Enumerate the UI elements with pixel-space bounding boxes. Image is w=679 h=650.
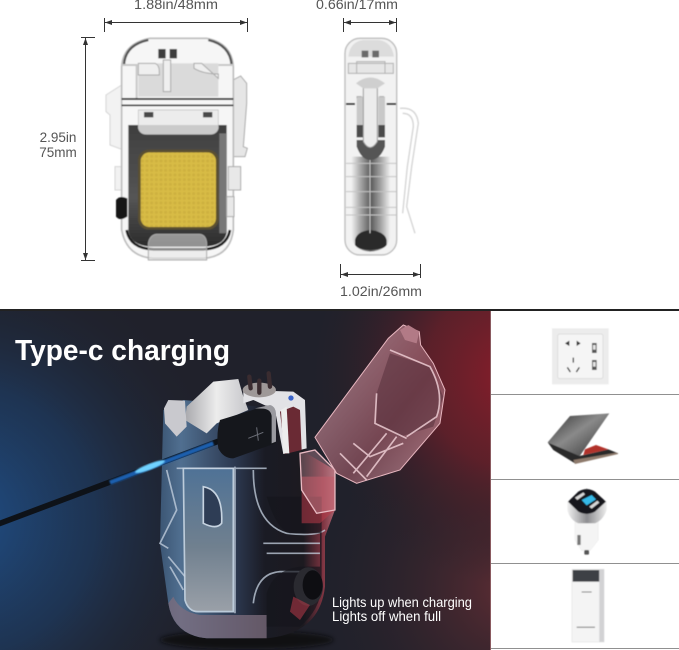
lower body — [160, 400, 335, 638]
block highlight — [281, 407, 289, 453]
metal plate — [185, 379, 248, 433]
plug collar — [255, 405, 276, 443]
right clip — [233, 76, 247, 157]
hinge — [300, 450, 335, 513]
side frame — [122, 65, 233, 100]
window round opening — [203, 487, 222, 527]
lighter photo — [0, 325, 445, 649]
note: charging indicator: Lights up when charging — [332, 595, 472, 610]
red lower glow — [380, 498, 490, 650]
note: charging indicator: Lights off when full — [332, 609, 441, 624]
case outline — [345, 38, 397, 255]
side strips — [219, 133, 227, 233]
dimension: side depth: 1.02in/26mm — [340, 284, 422, 299]
blue led — [288, 395, 294, 401]
left cap — [164, 400, 187, 437]
COB yellow — [141, 152, 216, 227]
dark battery body — [128, 125, 227, 247]
bottom dark curve — [355, 230, 387, 250]
central blade — [363, 83, 377, 147]
dark lower core — [352, 157, 390, 252]
top electrodes — [362, 51, 379, 57]
electrodes — [249, 373, 270, 393]
seal — [346, 97, 396, 104]
neck — [138, 110, 218, 134]
block dark — [280, 407, 302, 454]
hinge ring — [357, 140, 385, 160]
plug logo — [248, 427, 263, 441]
icon: laptop — [548, 413, 618, 464]
side dark windows — [357, 125, 385, 137]
electrode ring — [243, 383, 276, 397]
outer case — [122, 38, 233, 258]
note: charging indicator — [332, 595, 472, 624]
floor shadow — [160, 631, 333, 649]
usb plug — [218, 406, 268, 458]
left transparent flap — [106, 85, 127, 190]
top edge — [0, 309, 679, 311]
right side bumps — [227, 167, 241, 217]
black core — [267, 497, 322, 627]
metal insert — [138, 63, 218, 97]
panel background — [0, 311, 490, 650]
column dividers — [491, 394, 679, 648]
blue background glow — [0, 312, 164, 650]
lid top latch — [400, 325, 419, 343]
open lid — [315, 325, 445, 483]
panel: type-c charging photo — [0, 311, 490, 650]
blade neck — [356, 77, 385, 88]
seal lines — [122, 99, 233, 105]
cable blue glow — [110, 443, 213, 483]
neck windows — [144, 112, 212, 117]
button ring — [294, 567, 323, 606]
side button — [116, 197, 127, 219]
insert notches — [138, 60, 218, 92]
cable — [0, 441, 220, 524]
top cap shading — [348, 40, 394, 57]
product: lighter front view — [106, 38, 247, 260]
electrodes — [158, 49, 177, 58]
column background — [490, 311, 679, 650]
side columns — [357, 97, 385, 137]
bottom curve — [127, 230, 230, 249]
dimension: front width — [104, 0, 248, 32]
lid ribs — [340, 350, 440, 480]
panel: charging sources — [490, 311, 679, 650]
top cap dark edge — [124, 40, 232, 65]
COB light panel — [138, 150, 219, 230]
dimension: height: 75mm — [39, 145, 77, 160]
bottom tab — [148, 234, 207, 260]
red reflection — [290, 477, 335, 620]
glass window — [183, 468, 233, 612]
cable flare — [134, 459, 166, 474]
icon: power bank — [572, 569, 604, 642]
top frame — [348, 62, 393, 73]
lid inner dark — [377, 353, 443, 437]
body highlights — [160, 467, 325, 613]
pocket clip — [400, 108, 418, 233]
ribs — [346, 160, 396, 233]
product: lighter side view — [345, 38, 418, 255]
side button — [303, 570, 323, 600]
icon: wall socket — [552, 328, 609, 384]
dimension: side depth — [340, 264, 422, 299]
column left edge — [490, 311, 491, 650]
dimension: side width — [316, 0, 398, 32]
dimension: height — [39, 38, 95, 260]
heading: Type-c charging — [15, 335, 230, 367]
icon: car charger — [567, 488, 607, 555]
red upper glow — [348, 311, 490, 520]
left bottom pink tint — [168, 597, 267, 638]
right metal block — [243, 390, 307, 454]
dimension: height: 2.95in — [40, 130, 76, 145]
